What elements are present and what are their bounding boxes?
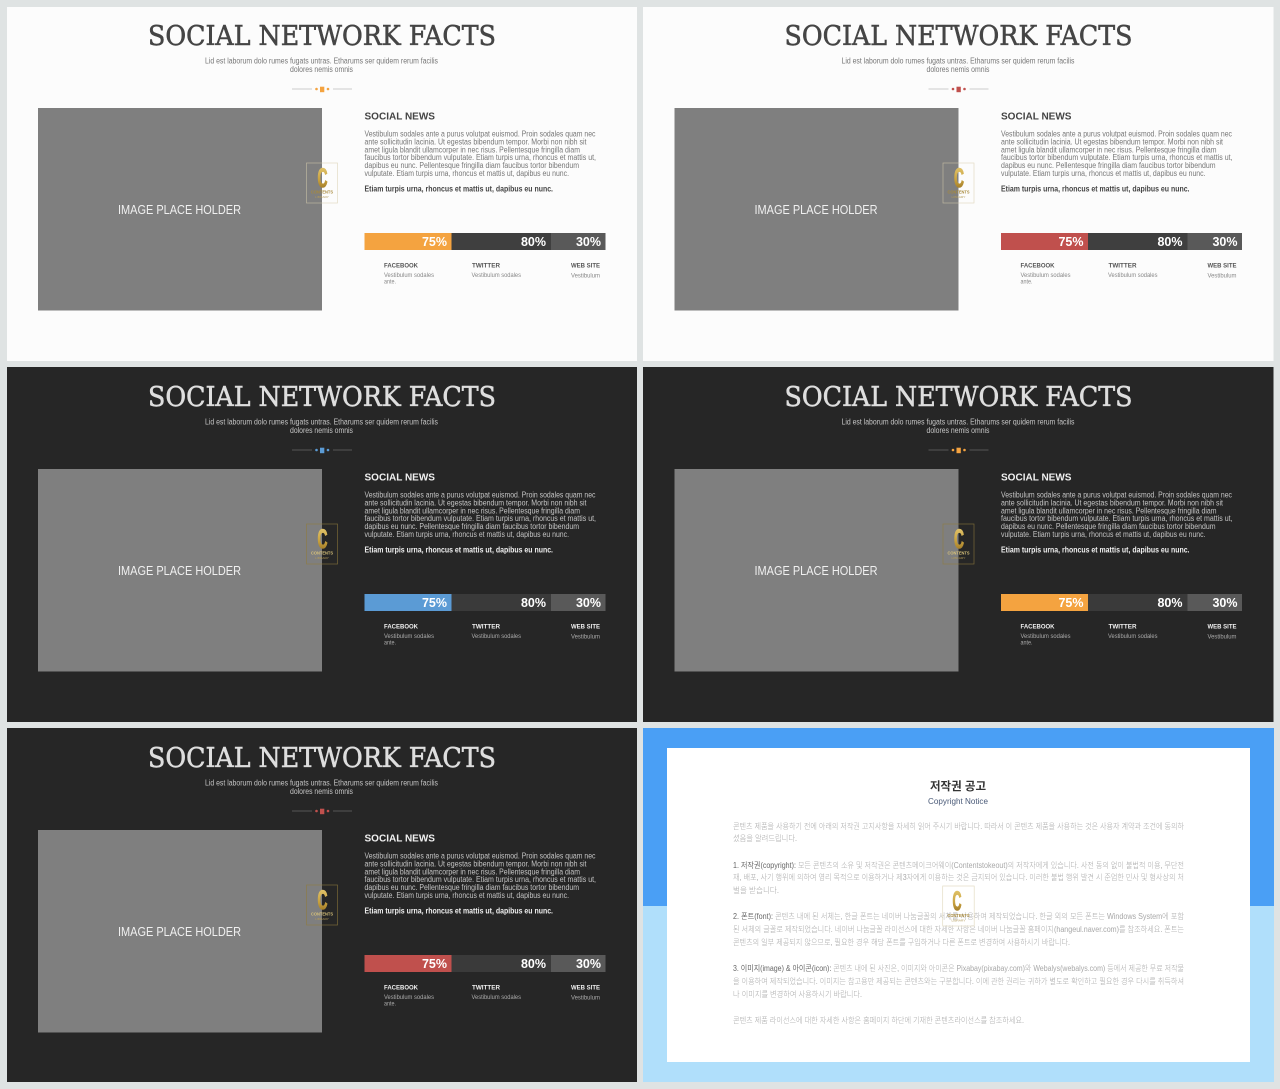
bold note: Etiam turpis urna, rhoncus et mattis ut, dapibus eu nunc.: [1001, 546, 1190, 555]
notice section 3: 을 이용하여 제작되었습니다. 이미지는 참고용만 제공되는 콘텐츠와는 구분합니다. 이에 관한 권리는 귀하가 별도로 확인하고 필요한 경우 다시를 취득하셔: [733, 976, 1184, 986]
divider ornament: [292, 87, 352, 92]
paragraph: amet ligula blandit ullamcorper in nec risus. Pellentesque fringilla diam: [364, 145, 580, 154]
paragraph: amet ligula blandit ullamcorper in nec risus. Pellentesque fringilla diam: [1001, 145, 1217, 154]
logo badge: C: [954, 163, 964, 193]
legend: twitter: [472, 623, 521, 640]
logo badge: CONTENTS: [311, 550, 333, 556]
legend: web site: [1208, 623, 1237, 640]
logo badge: CONTENTS: [948, 550, 970, 556]
heading: SOCIAL NEWS: [364, 472, 435, 484]
paragraph: vulputate. Etiam turpis urna, rhoncus et mattis ut, dapibus eu nunc.: [364, 169, 569, 178]
subtitle: Lid est laborum dolo rumes fugats untras. Etharums ser quidem rerum facilis: [205, 56, 438, 66]
paragraph: dapibus eu nunc. Pellentesque fringilla diam faucibus tortor bibendum: [364, 522, 579, 531]
notice subtitle: Copyright Notice: [928, 796, 988, 806]
paragraph: vulputate. Etiam turpis urna, rhoncus et mattis ut, dapibus eu nunc.: [364, 891, 569, 900]
image placeholder: IMAGE PLACE HOLDER: [754, 564, 878, 578]
legend: facebook: ante.: [384, 640, 396, 646]
legend: facebook: ante.: [1020, 278, 1033, 286]
subtitle: Lid est laborum dolo rumes fugats untras. Etharums ser quidem rerum facilis: [842, 418, 1074, 426]
legend: twitter: Vestibulum sodales: [472, 994, 521, 1001]
legend: web site: WEB SITE: [571, 984, 601, 991]
logo badge: [306, 524, 338, 564]
paragraph: dapibus eu nunc. Pellentesque fringilla diam faucibus tortor bibendum: [1001, 522, 1216, 531]
subtitle: [842, 56, 1074, 74]
subtitle: Lid est laborum dolo rumes fugats untras. Etharums ser quidem rerum facilis: [205, 418, 438, 426]
panel: light slide with red accent: [643, 7, 1274, 361]
stacked bar: [1001, 233, 1242, 250]
logo badge: CONTENTS: [311, 912, 333, 916]
subtitle: [842, 418, 1074, 435]
paragraph: ante sollicitudin lacinia. Ut egestas bibendum tempor. Morbi non nibh sit: [1001, 498, 1224, 508]
paragraph: vulputate. Etiam turpis urna, rhoncus et mattis ut, dapibus eu nunc.: [1001, 169, 1206, 178]
stacked bar: 75%: [422, 235, 447, 249]
paragraph: dapibus eu nunc. Pellentesque fringilla diam faucibus tortor bibendum: [364, 161, 579, 170]
notice section 2: 콘텐츠의 일부 제공되지 않으므로, 필요한 경우 해당 폰트를 구입하거나 다른 폰트로 변경하여 사용하시기 바랍니다.: [733, 937, 1070, 947]
legend: facebook: Vestibulum sodales: [1020, 633, 1070, 640]
legend: facebook: FACEBOOK: [1020, 262, 1055, 269]
subtitle: dolores nemis omnis: [290, 65, 353, 74]
paragraph: faucibus tortor bibendum vulputate. Etiam turpis urna, rhoncus et mattis ut,: [364, 514, 596, 523]
subtitle: [205, 418, 438, 435]
legend: web site: [1208, 262, 1237, 280]
legend: web site: [571, 623, 601, 640]
legend: web site: Vestibulum: [571, 634, 600, 640]
notice section 3: 3. 이미지(image) & 아이콘(icon): 콘텐츠 내에 된 사진은, 이미지와 아이콘은 Pixabay(pixabay.com)와 Webalys(webalys.com) 등에서 제공한 무료 저작물: [733, 963, 1184, 973]
notice intro: [733, 821, 1185, 843]
image placeholder: IMAGE PLACE HOLDER: [118, 925, 241, 939]
stacked bar: 30%: [576, 957, 601, 971]
legend: facebook: FACEBOOK: [384, 984, 418, 991]
stacked bar: 80%: [521, 235, 546, 249]
panel: dark slide with orange accent: [643, 367, 1274, 722]
stacked bar: 30%: [1212, 235, 1238, 249]
panel: dark slide with blue accent: [7, 367, 637, 722]
legend: twitter: TWITTER: [472, 262, 500, 269]
subtitle: dolores nemis omnis: [926, 65, 990, 74]
stacked bar: [364, 233, 606, 250]
paragraph: [364, 852, 596, 900]
paragraph: [364, 130, 596, 178]
legend: web site: WEB SITE: [1208, 623, 1237, 630]
notice title: 저작권 공고: [930, 779, 986, 793]
subtitle: dolores nemis omnis: [290, 787, 353, 796]
subtitle: Lid est laborum dolo rumes fugats untras. Etharums ser quidem rerum facilis: [842, 56, 1074, 66]
bold note: Etiam turpis urna, rhoncus et mattis ut, dapibus eu nunc.: [364, 185, 553, 194]
paragraph: faucibus tortor bibendum vulputate. Etiam turpis urna, rhoncus et mattis ut,: [1001, 514, 1232, 523]
logo badge: [943, 524, 974, 564]
notice intro: 셨음을 알려드립니다.: [733, 834, 797, 843]
paragraph: dapibus eu nunc. Pellentesque fringilla diam faucibus tortor bibendum: [1001, 161, 1216, 170]
stacked bar: 80%: [1157, 235, 1182, 249]
paragraph: ante sollicitudin lacinia. Ut egestas bibendum tempor. Morbi non nibh sit: [364, 138, 587, 146]
logo badge: CONTENTS: [948, 913, 970, 918]
logo badge: [943, 886, 974, 926]
stacked bar: 75%: [422, 596, 447, 610]
legend: web site: [571, 984, 601, 1002]
paragraph: Vestibulum sodales ante a purus volutpat euismod. Proin sodales quam nec: [364, 490, 596, 500]
divider ornament: [928, 448, 988, 453]
paragraph: faucibus tortor bibendum vulputate. Etiam turpis urna, rhoncus et mattis ut,: [364, 875, 596, 884]
legend: twitter: [472, 262, 521, 279]
legend: twitter: TWITTER: [1108, 623, 1137, 630]
notice section 2: 2. 폰트(font): 콘텐츠 내에 된 서체는, 한글 폰트는 네이버 나눔글꼴의 서체를 사용하여 제작되었습니다. 한글 외의 모든 폰트는 Windows System에 포함: [733, 911, 1185, 921]
notice section 1: [733, 860, 1184, 895]
paragraph: faucibus tortor bibendum vulputate. Etiam turpis urna, rhoncus et mattis ut,: [1001, 153, 1232, 162]
logo badge: LIBRARY: [952, 918, 966, 922]
divider ornament: [292, 809, 352, 814]
image placeholder: [38, 108, 322, 310]
legend: twitter: TWITTER: [1108, 262, 1137, 269]
legend: twitter: Vestibulum sodales: [1108, 633, 1158, 640]
legend: twitter: [1108, 262, 1158, 279]
logo badge: C: [954, 524, 964, 554]
paragraph: [1001, 130, 1232, 178]
bold note: Etiam turpis urna, rhoncus et mattis ut, dapibus eu nunc.: [364, 546, 553, 555]
title: SOCIAL NETWORK FACTS: [148, 381, 496, 413]
stacked bar: 30%: [576, 235, 601, 249]
notice intro: 콘텐츠 제품을 사용하기 전에 아래의 저작권 고지사항을 자세히 읽어 주시기 바랍니다. 따라서 이 콘텐츠 제품을 사용하는 것은 사용자 계약과 조건에 동의하: [733, 821, 1185, 831]
logo badge: [306, 885, 338, 925]
bold note: Etiam turpis urna, rhoncus et mattis ut, dapibus eu nunc.: [364, 907, 553, 916]
legend: web site: WEB SITE: [571, 262, 601, 269]
legend: facebook: [384, 262, 434, 286]
legend: web site: WEB SITE: [571, 623, 601, 630]
title: SOCIAL NETWORK FACTS: [784, 381, 1132, 413]
image placeholder: IMAGE PLACE HOLDER: [118, 203, 241, 217]
paragraph: amet ligula blandit ullamcorper in nec risus. Pellentesque fringilla diam: [364, 867, 580, 876]
panel: light slide with orange accent: [7, 7, 637, 361]
legend: twitter: TWITTER: [472, 623, 500, 630]
logo badge: C: [318, 885, 328, 915]
legend: twitter: Vestibulum sodales: [1108, 272, 1158, 279]
paragraph: dapibus eu nunc. Pellentesque fringilla diam faucibus tortor bibendum: [364, 883, 579, 892]
logo badge: C: [952, 886, 962, 916]
paragraph: vulputate. Etiam turpis urna, rhoncus et mattis ut, dapibus eu nunc.: [364, 530, 569, 539]
notice section 2: [733, 911, 1185, 947]
paragraph: ante sollicitudin lacinia. Ut egestas bibendum tempor. Morbi non nibh sit: [1001, 138, 1224, 146]
paragraph: Vestibulum sodales ante a purus volutpat euismod. Proin sodales quam nec: [364, 130, 596, 138]
paragraph: Vestibulum sodales ante a purus volutpat euismod. Proin sodales quam nec: [1001, 490, 1232, 500]
legend: web site: Vestibulum: [571, 272, 600, 280]
paragraph: Vestibulum sodales ante a purus volutpat euismod. Proin sodales quam nec: [1001, 130, 1232, 138]
paragraph: vulputate. Etiam turpis urna, rhoncus et mattis ut, dapibus eu nunc.: [1001, 530, 1206, 539]
title: SOCIAL NETWORK FACTS: [784, 20, 1132, 52]
legend: twitter: [472, 984, 521, 1001]
divider ornament: [928, 87, 988, 92]
divider ornament: [292, 448, 352, 453]
logo badge: [306, 163, 338, 203]
notice section 3: 나 이미지를 변경하여 사용하시기 바랍니다.: [733, 989, 862, 999]
logo badge: LIBRARY: [315, 556, 329, 560]
stacked bar: [364, 594, 606, 611]
notice section 1: 1. 저작권(copyright): 모든 콘텐츠의 소유 및 저작권은 콘텐츠메이크어웨이(Contentstokeout)의 저작자에게 있습니다. 사전 동의 없이 불법적 이용, 무단전: [733, 860, 1184, 870]
stacked bar: 30%: [1212, 596, 1238, 610]
legend: facebook: [1020, 262, 1070, 286]
legend: facebook: FACEBOOK: [384, 262, 418, 269]
legend: twitter: [1108, 623, 1158, 640]
legend: twitter: Vestibulum sodales: [472, 633, 521, 640]
image placeholder: [674, 108, 958, 310]
notice section 1: 재, 배포, 사기 행위에 의하여 영리 목적으로 이용하거나 제3자에게 이용하는 것은 금지되어 있습니다. 이러한 불법 행위 발견 시 준엄한 민사 및 형사상의 처: [733, 872, 1184, 882]
stacked bar: 80%: [1157, 596, 1182, 610]
panel: dark slide with red accent: [7, 728, 637, 1082]
image placeholder: IMAGE PLACE HOLDER: [754, 203, 878, 217]
paragraph: amet ligula blandit ullamcorper in nec risus. Pellentesque fringilla diam: [1001, 506, 1217, 515]
subtitle: dolores nemis omnis: [926, 426, 990, 435]
legend: facebook: [384, 984, 434, 1008]
stacked bar: 75%: [422, 957, 447, 971]
heading: SOCIAL NEWS: [1001, 472, 1072, 484]
notice section 2: 된 서체의 글꼴로 제작되었습니다. 네이버 나눔글꼴 라이선스에 대한 자세한 사항은 네이버 나눔글꼴 홈페이지(hangeul.naver.com)를 참조하세요. 폰트는: [733, 924, 1184, 934]
notice section 1: 벌을 받습니다.: [733, 886, 779, 895]
legend: web site: Vestibulum: [1208, 634, 1236, 640]
heading: SOCIAL NEWS: [364, 832, 435, 844]
paragraph: Vestibulum sodales ante a purus volutpat euismod. Proin sodales quam nec: [364, 852, 596, 860]
legend: facebook: ante.: [384, 1000, 396, 1008]
legend: facebook: Vestibulum sodales: [384, 633, 434, 640]
paragraph: ante sollicitudin lacinia. Ut egestas bibendum tempor. Morbi non nibh sit: [364, 498, 587, 508]
notice section 3: [733, 963, 1184, 999]
legend: facebook: ante.: [384, 278, 396, 286]
legend: facebook: Vestibulum sodales: [384, 994, 434, 1001]
logo badge: CONTENTS: [311, 190, 333, 194]
logo badge: LIBRARY: [952, 195, 966, 199]
legend: facebook: Vestibulum sodales: [384, 272, 434, 279]
stacked bar: 75%: [1058, 596, 1084, 610]
legend: web site: WEB SITE: [1208, 262, 1237, 269]
stacked bar: [364, 955, 606, 972]
logo badge: LIBRARY: [315, 195, 329, 199]
legend: twitter: Vestibulum sodales: [472, 272, 521, 279]
image placeholder: [38, 469, 322, 672]
legend: facebook: [1020, 623, 1070, 646]
legend: web site: Vestibulum: [1208, 272, 1236, 280]
image placeholder: IMAGE PLACE HOLDER: [118, 564, 241, 578]
stacked bar: 80%: [521, 957, 546, 971]
heading: SOCIAL NEWS: [364, 110, 435, 122]
paragraph: faucibus tortor bibendum vulputate. Etiam turpis urna, rhoncus et mattis ut,: [364, 153, 596, 162]
paragraph: ante sollicitudin lacinia. Ut egestas bibendum tempor. Morbi non nibh sit: [364, 860, 587, 868]
logo badge: C: [318, 524, 328, 554]
subtitle: Lid est laborum dolo rumes fugats untras. Etharums ser quidem rerum facilis: [205, 778, 438, 788]
legend: facebook: ante.: [1020, 640, 1033, 646]
stacked bar: [1001, 594, 1242, 611]
subtitle: [205, 778, 438, 796]
subtitle: [205, 56, 438, 74]
legend: facebook: [384, 623, 434, 646]
legend: facebook: FACEBOOK: [384, 623, 418, 630]
title: SOCIAL NETWORK FACTS: [148, 742, 496, 774]
title: SOCIAL NETWORK FACTS: [148, 20, 496, 52]
panel: copyright notice: [643, 728, 1274, 1082]
legend: facebook: FACEBOOK: [1020, 623, 1055, 630]
stacked bar: 30%: [576, 596, 601, 610]
image placeholder: [38, 830, 322, 1032]
legend: facebook: Vestibulum sodales: [1020, 272, 1070, 279]
legend: web site: Vestibulum: [571, 994, 600, 1002]
notice footer line: 콘텐츠 제품 라이선스에 대한 자세한 사항은 홈페이지 하단에 기재한 콘텐츠라이선스를 참조하세요.: [733, 1015, 1024, 1025]
heading: SOCIAL NEWS: [1001, 110, 1072, 122]
image placeholder: [674, 469, 958, 672]
legend: twitter: TWITTER: [472, 984, 500, 991]
logo badge: CONTENTS: [948, 190, 970, 194]
paragraph: amet ligula blandit ullamcorper in nec risus. Pellentesque fringilla diam: [364, 506, 580, 515]
paragraph: [364, 490, 596, 539]
stacked bar: 75%: [1058, 235, 1084, 249]
paragraph: [1001, 490, 1232, 539]
logo badge: C: [318, 163, 328, 193]
legend: web site: [571, 262, 601, 280]
subtitle: dolores nemis omnis: [290, 426, 353, 435]
logo badge: LIBRARY: [952, 556, 966, 560]
logo badge: [943, 163, 974, 203]
stacked bar: 80%: [521, 596, 546, 610]
logo badge: LIBRARY: [315, 917, 329, 921]
bold note: Etiam turpis urna, rhoncus et mattis ut, dapibus eu nunc.: [1001, 185, 1190, 194]
